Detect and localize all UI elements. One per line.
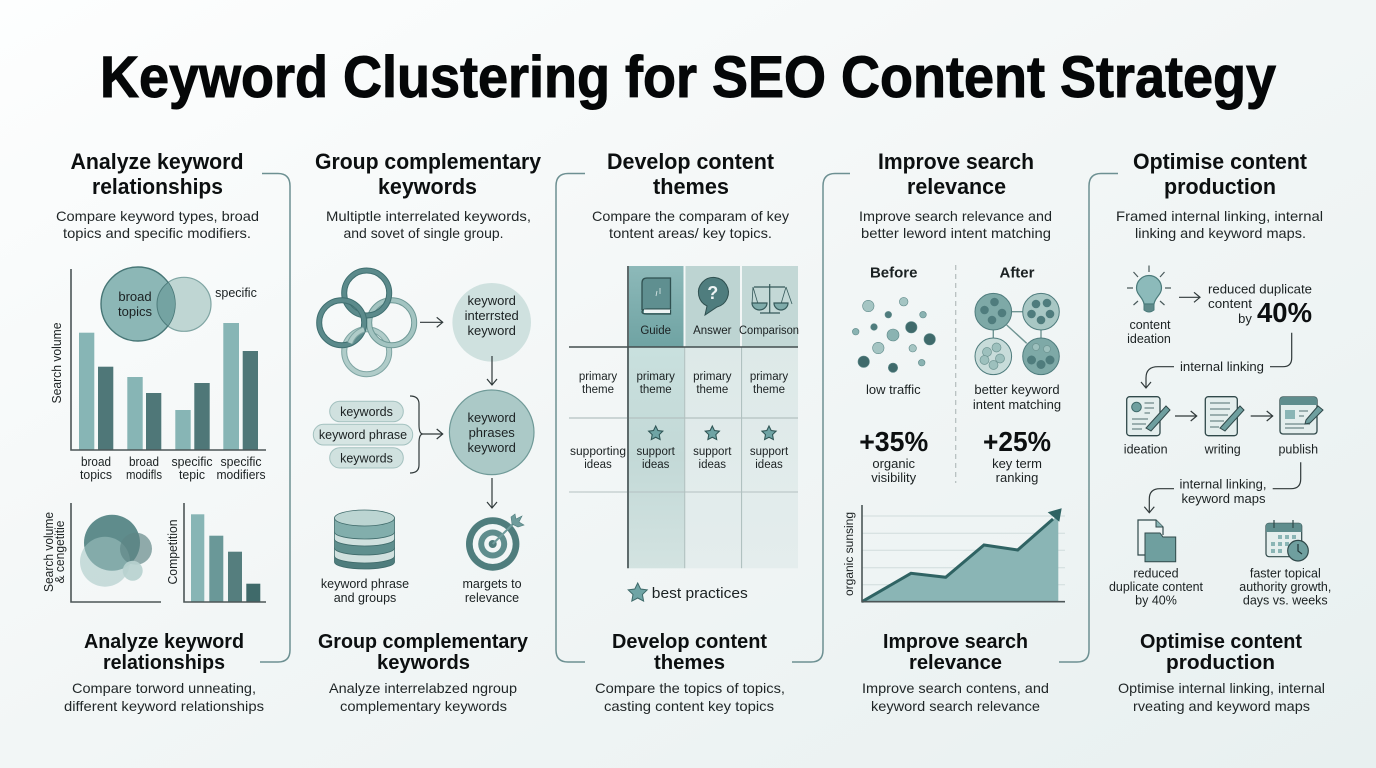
content matrix table: Guide <box>640 325 671 337</box>
heading: analyze: Analyze keyword <box>70 149 244 174</box>
icon: file and folder <box>1138 520 1176 562</box>
icon: answer bubble <box>698 277 728 315</box>
heading: group: Group complementary <box>315 149 542 174</box>
label: ideation: ideation <box>1124 442 1168 456</box>
arrow <box>491 356 493 385</box>
content matrix table: primary <box>750 371 788 383</box>
bubble chart: Search volume <box>42 512 56 592</box>
before heading: Before <box>870 264 917 282</box>
heading: optimise footer: Optimise content <box>1140 631 1302 653</box>
text: group footer: complementary keywords <box>340 698 507 714</box>
heading: develop <box>607 149 775 199</box>
text: improve intro: Improve search relevance and <box>859 208 1052 224</box>
heading: group <box>315 149 542 199</box>
heading: develop footer: themes <box>654 652 725 674</box>
label: content ideation: content <box>1129 318 1171 332</box>
text: develop intro: tontent areas/ key topics. <box>609 225 772 241</box>
text: analyze footer: Compare torword unneating, <box>72 680 256 696</box>
circle: interrelated keyword: keyword <box>467 323 516 338</box>
heading: improve footer: Improve search <box>883 631 1028 653</box>
bubble chart: & cengetitie <box>53 520 67 584</box>
bar chart: search volume <box>49 269 266 482</box>
text: improve intro: better leword intent matching <box>861 225 1051 241</box>
before: scattered dots <box>852 297 935 372</box>
stat: reduced duplicate content: 40% <box>1257 297 1312 328</box>
heading: optimise <box>1133 149 1308 199</box>
heading: improve footer <box>883 631 1028 674</box>
keyword pills: keywords <box>340 405 393 419</box>
text: analyze intro: Compare keyword types, broad <box>56 208 259 224</box>
stat: reduced duplicate content: by <box>1238 311 1252 326</box>
connector: internal linking, keyword maps: internal linking, <box>1180 476 1266 492</box>
text: analyze footer: different keyword relationships <box>64 698 264 714</box>
stat: key term ranking: key term <box>992 456 1042 471</box>
label: publish: publish <box>1278 442 1318 456</box>
label: faster topical authority growth <box>1239 566 1331 608</box>
stat: reduced duplicate content: content <box>1208 296 1252 311</box>
text: group intro: and sovet of single group. <box>344 225 504 241</box>
heading: analyze <box>70 149 244 199</box>
text: analyze intro <box>56 208 259 241</box>
bar chart: search volume: broad <box>81 455 111 469</box>
heading: optimise footer <box>1140 631 1302 674</box>
after heading: After <box>999 264 1035 282</box>
text: analyze intro: topics and specific modifiers. <box>63 225 251 241</box>
circle: keyword phrases: keyword <box>467 410 516 425</box>
content matrix table: Comparison <box>739 325 799 337</box>
heading: develop footer <box>612 631 767 674</box>
bar chart: search volume: modifiers <box>216 468 266 482</box>
legend: best practices: best practices <box>652 585 748 602</box>
content matrix table <box>569 266 799 568</box>
icon: guide book <box>642 278 670 314</box>
label: target: margets to <box>462 577 522 591</box>
text: improve intro <box>859 208 1052 241</box>
bar chart: search volume: tepic <box>179 468 205 482</box>
text: develop footer <box>595 680 785 714</box>
label: faster topical authority growth: faster topical <box>1250 566 1321 580</box>
heading: analyze footer: Analyze keyword <box>84 631 244 653</box>
stat: key term ranking: ranking <box>996 470 1038 485</box>
heading: group footer: keywords <box>377 652 470 674</box>
area chart: organic growth: organic sunsing <box>844 512 856 596</box>
stat: organic visibility <box>859 426 928 485</box>
text: group footer: Analyze interrelabzed ngroup <box>329 680 517 696</box>
connector: internal linking: internal linking <box>1180 359 1264 374</box>
panel: group complementary keywords <box>313 149 542 714</box>
text: optimise intro <box>1116 208 1323 241</box>
bubble chart <box>42 503 161 602</box>
content matrix table: theme <box>753 384 785 396</box>
icon: target <box>466 514 524 571</box>
text: improve footer <box>862 680 1049 714</box>
text: optimise footer: rveating and keyword maps <box>1133 698 1310 714</box>
heading: improve: Improve search <box>878 149 1034 174</box>
icon: writing doc <box>1205 397 1244 436</box>
text: develop intro <box>592 208 789 241</box>
label: content ideation: ideation <box>1127 332 1171 346</box>
icon: light bulb <box>1127 266 1171 312</box>
content matrix table: theme <box>640 384 672 396</box>
content matrix table: primary <box>693 371 732 383</box>
heading: develop footer: Develop content <box>612 631 767 653</box>
connector: internal linking, keyword maps: keyword maps <box>1182 491 1266 506</box>
connector: internal linking <box>1146 333 1292 388</box>
heading: improve: relevance <box>907 174 1006 199</box>
heading: analyze footer: relationships <box>103 652 225 674</box>
content matrix table: supporting <box>570 446 626 458</box>
label: content ideation <box>1127 318 1171 346</box>
bar chart: search volume: specific <box>172 455 212 469</box>
label: database <box>321 577 409 605</box>
label: reduced duplicate content: by 40% <box>1135 594 1177 608</box>
legend: best practices <box>628 583 748 602</box>
icon: linked rings <box>319 270 414 374</box>
content matrix table: ideas <box>642 459 670 471</box>
label: reduced duplicate content: reduced <box>1133 566 1179 580</box>
icon: calendar and clock <box>1266 520 1308 561</box>
label: better keyword intent matching: intent matching <box>973 397 1061 412</box>
content matrix table: theme <box>696 384 728 396</box>
stat: organic visibility: organic <box>872 456 916 471</box>
icon: answer bubble: ? <box>707 283 718 303</box>
text: develop footer: Compare the topics of topics, <box>595 680 785 696</box>
label: better keyword intent matching: better keyword <box>974 382 1060 397</box>
icon: ideation doc <box>1127 397 1170 436</box>
text: optimise intro: linking and keyword maps. <box>1135 225 1306 241</box>
icon: publish page <box>1280 397 1323 434</box>
label: target: relevance <box>465 591 519 605</box>
label: database: keyword phrase <box>321 577 409 591</box>
label: reduced duplicate content: duplicate content <box>1109 580 1204 594</box>
text: develop intro: Compare the comparam of key <box>592 208 789 224</box>
label: low traffic: low traffic <box>866 382 921 397</box>
heading: analyze footer <box>84 631 244 674</box>
bar chart: search volume: specific <box>220 455 262 469</box>
heading: group: keywords <box>378 174 477 199</box>
content matrix table: theme <box>582 384 614 396</box>
venn diagram: broad <box>118 289 152 304</box>
text: group intro <box>326 208 531 241</box>
bar chart: competition <box>165 503 266 602</box>
text: group intro: Multiptle interrelated keywords, <box>326 208 531 224</box>
bar chart: search volume: broad <box>129 455 159 469</box>
circle: interrelated keyword: keyword <box>467 293 516 308</box>
text: improve footer: keyword search relevance <box>871 698 1040 714</box>
stat: key term ranking: +25% <box>983 426 1051 457</box>
bar chart: search volume: Search volume <box>49 322 64 404</box>
icon: stars <box>649 426 776 440</box>
content matrix table: primary <box>637 371 675 383</box>
content matrix table: ideas <box>584 459 612 471</box>
circle: interrelated keyword <box>452 283 531 362</box>
label: better keyword intent matching <box>973 382 1061 412</box>
text: optimise footer <box>1118 680 1325 714</box>
icon: database <box>334 510 394 569</box>
heading: group footer: Group complementary <box>318 631 529 653</box>
arrow <box>1175 415 1197 417</box>
label: reduced duplicate content <box>1109 566 1204 608</box>
text: analyze footer <box>64 680 264 714</box>
text: improve footer: Improve search contens, and <box>862 680 1049 696</box>
text: develop footer: casting content key topics <box>604 698 774 714</box>
content matrix table: support <box>693 446 732 458</box>
heading: analyze: relationships <box>92 174 223 199</box>
arrow <box>1179 296 1200 298</box>
area chart: organic growth <box>844 505 1065 602</box>
panel: analyze keyword relationships <box>42 149 266 714</box>
stat: key term ranking <box>983 426 1051 485</box>
brace <box>410 396 423 473</box>
heading: optimise footer: production <box>1166 652 1275 674</box>
divider brackets <box>260 174 1118 662</box>
panel: develop content themes <box>569 149 799 714</box>
stat: reduced duplicate content <box>1208 282 1312 328</box>
circle: keyword phrases: phrases <box>469 425 515 440</box>
venn diagram: topics <box>118 304 152 319</box>
keyword pills: keywords <box>340 452 393 466</box>
panel: improve search relevance <box>844 149 1065 714</box>
title: Keyword Clustering for SEO Content Strategy <box>100 45 1276 110</box>
label: writing: writing <box>1204 442 1241 456</box>
content matrix table: ideas <box>699 459 726 471</box>
content matrix table: ideas <box>755 459 783 471</box>
heading: develop: Develop content <box>607 149 775 174</box>
panel: optimise content production <box>1109 149 1331 714</box>
text: optimise footer: Optimise internal linking, internal <box>1118 680 1325 696</box>
heading: group footer <box>318 631 529 674</box>
label: database: and groups <box>334 591 396 605</box>
arrow <box>420 321 443 323</box>
stat: reduced duplicate content: reduced duplicate <box>1208 282 1312 296</box>
connector: internal linking, keyword maps <box>1149 462 1301 513</box>
label: target <box>462 577 522 605</box>
text: optimise intro: Framed internal linking, internal <box>1116 208 1323 224</box>
content matrix table: primary <box>579 371 617 383</box>
text: group footer <box>329 680 517 714</box>
venn diagram <box>101 267 257 341</box>
stat: organic visibility: +35% <box>859 426 928 457</box>
heading: improve footer: relevance <box>909 652 1002 674</box>
label: faster topical authority growth: authority growth, <box>1239 580 1331 594</box>
bar chart: search volume: modifls <box>126 468 162 482</box>
circle: interrelated keyword: interrsted <box>465 308 519 323</box>
arrow <box>1251 415 1273 417</box>
keyword pills <box>313 401 413 468</box>
content matrix table: support <box>637 446 676 458</box>
heading: develop: themes <box>653 174 729 199</box>
keyword pills: keyword phrase <box>319 428 407 442</box>
content matrix table: Answer <box>693 325 732 337</box>
bar chart: competition: Competition <box>165 520 180 584</box>
circle: keyword phrases: keyword <box>467 440 516 455</box>
icon: comparison scales <box>752 284 792 313</box>
venn diagram: specific <box>215 286 257 300</box>
arrow <box>423 433 443 435</box>
after: linked clusters <box>975 293 1059 375</box>
heading: optimise: production <box>1164 174 1276 199</box>
bar chart: search volume: topics <box>80 468 112 482</box>
heading: improve <box>878 149 1034 199</box>
content matrix table: support <box>750 446 789 458</box>
heading: optimise: Optimise content <box>1133 149 1308 174</box>
stat: organic visibility: visibility <box>871 470 917 485</box>
arrow <box>491 478 493 508</box>
circle: keyword phrases <box>449 390 534 475</box>
label: faster topical authority growth: days vs. weeks <box>1243 594 1328 608</box>
